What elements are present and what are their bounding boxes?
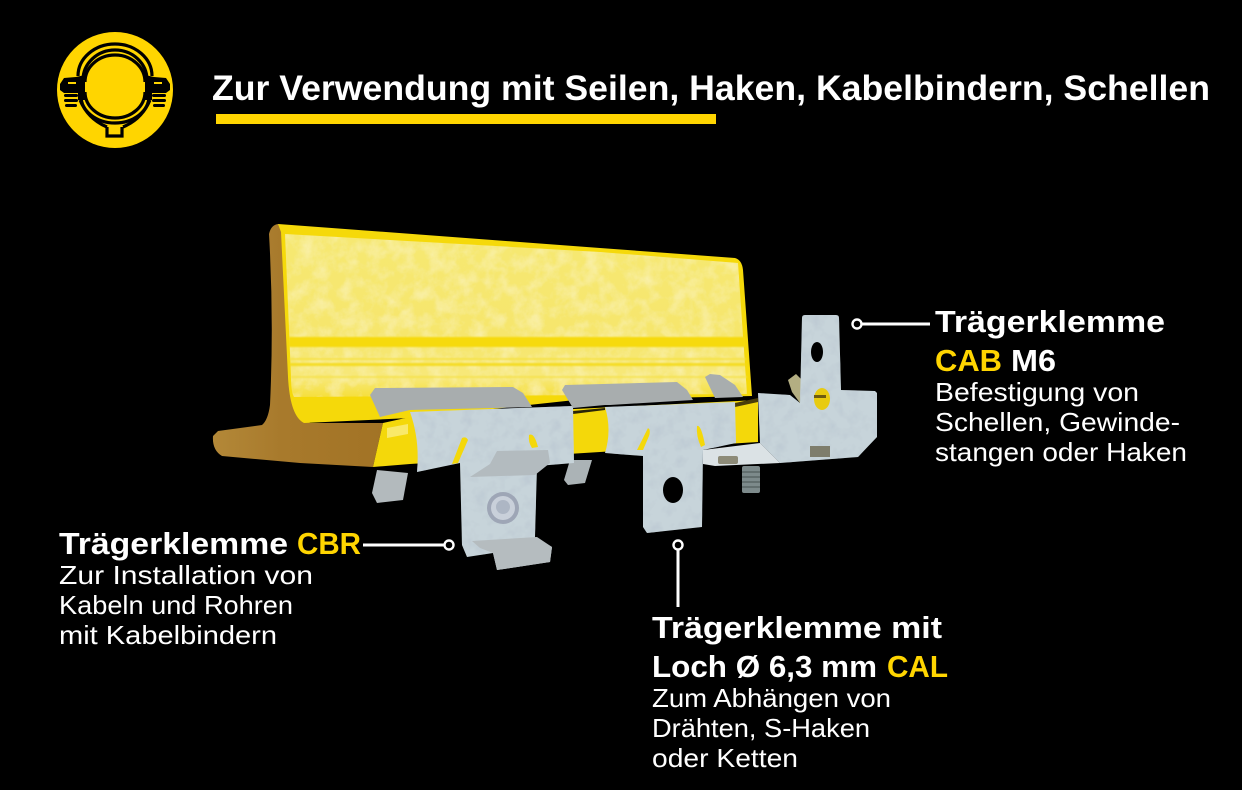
description: mit Kabelbindern [59,620,277,650]
callout: CAB M6 [852,304,1187,467]
heading: CAB [935,343,1002,378]
leader line [674,540,682,607]
heading: CBR [297,526,361,561]
heading [935,304,1165,378]
washer [487,492,519,524]
heading: Loch Ø 6,3 mm [652,649,877,684]
heading [652,610,948,684]
description: stangen oder Haken [935,437,1187,467]
leader line [363,540,454,550]
description [935,377,1187,467]
product photo: beam with clips [213,224,877,570]
callout: CAL [652,540,948,773]
strap upper [470,450,550,477]
title underline [216,114,716,124]
heading [59,526,361,561]
heading: CAL [887,649,948,684]
description: Zum Abhängen von [652,683,891,713]
beam end in shadow [213,224,383,467]
callout: CBR [59,526,454,650]
strap lower [472,537,552,570]
description: Befestigung von [935,377,1139,407]
heading: Trägerklemme [59,526,288,561]
description: Kabeln und Rohren [59,590,293,620]
beam stripes [289,337,747,378]
description [59,560,313,650]
heading: Trägerklemme [935,304,1165,339]
beam yellow body [278,224,752,423]
title: Zur Verwendung mit Seilen, Haken, Kabelbindern, Schellen [212,69,1210,108]
flange highlights [387,398,758,438]
description: Drähten, S-Haken [652,713,870,743]
clip 1 [370,387,592,570]
beam pale textured face [285,234,747,397]
description: Schellen, Gewinde- [935,407,1180,437]
description [652,683,891,773]
description: Zur Installation von [59,560,313,590]
heading: M6 [1011,343,1056,378]
icon: pipe clamp badge [57,32,173,148]
beam flange face [373,400,758,467]
clip 2 [562,374,743,533]
description: oder Ketten [652,743,798,773]
clip 3 (CAB M6) [758,315,877,463]
heading: Trägerklemme mit [652,610,942,645]
bolt [703,443,780,493]
leader line [852,320,930,328]
